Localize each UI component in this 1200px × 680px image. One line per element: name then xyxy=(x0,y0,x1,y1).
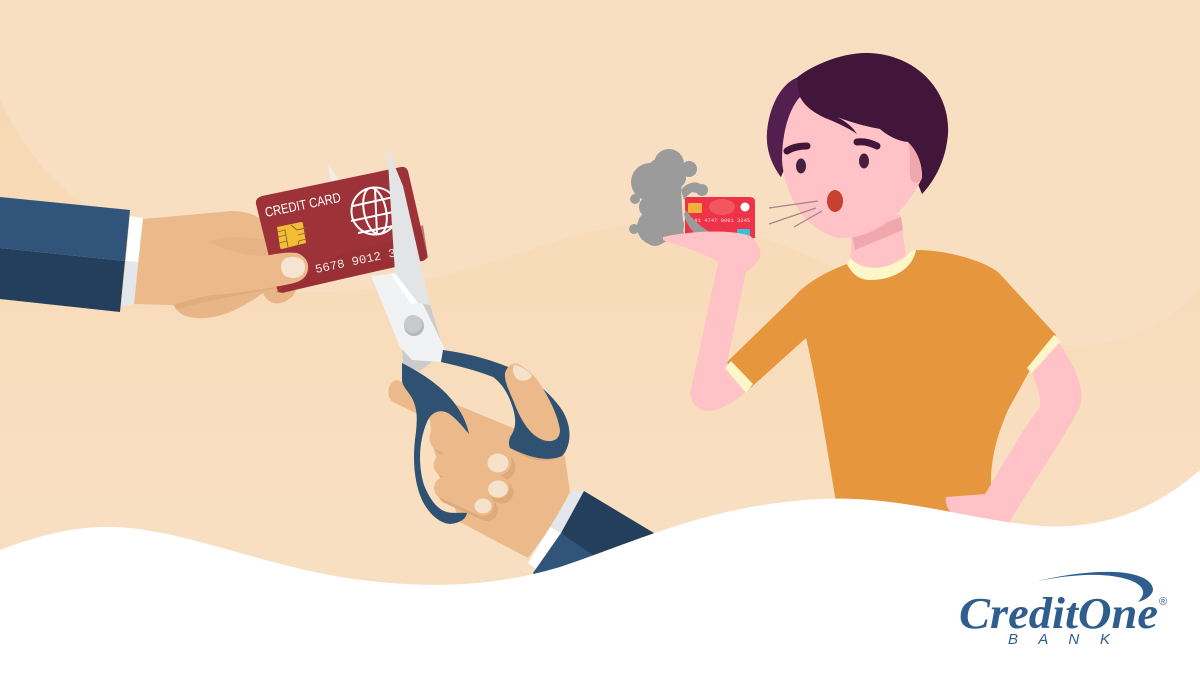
white lower blade xyxy=(371,273,445,362)
back arm xyxy=(946,343,1081,525)
shirt xyxy=(727,250,1056,515)
ear shadow xyxy=(908,143,922,183)
hand body and index finger xyxy=(388,380,570,558)
card number: 5678 9012 3 xyxy=(314,246,397,277)
globe icon xyxy=(351,186,398,236)
person xyxy=(629,53,1081,525)
logo bank text: B A N K xyxy=(1008,631,1111,648)
thumbnail xyxy=(281,257,305,278)
eyebrows xyxy=(787,142,877,151)
small card logo xyxy=(737,229,750,237)
mouth xyxy=(827,190,843,212)
collar xyxy=(847,250,916,280)
loop shadow xyxy=(512,438,566,461)
left handle loop xyxy=(402,363,469,524)
scissors handles xyxy=(402,350,570,524)
left hand palm xyxy=(134,211,300,305)
Credit One Bank logo xyxy=(959,572,1167,648)
hair back xyxy=(767,53,948,194)
front hair xyxy=(797,53,948,194)
eyes xyxy=(796,154,869,174)
blade highlight xyxy=(391,273,418,304)
finger shadows xyxy=(447,443,502,510)
credit card xyxy=(256,167,428,293)
raised arm xyxy=(663,230,760,411)
registered mark: ® xyxy=(1159,596,1167,608)
logo wordmark: CreditOne xyxy=(959,589,1158,638)
fingers xyxy=(443,438,498,505)
neck xyxy=(850,214,906,274)
small card chip xyxy=(688,203,702,213)
fingernails xyxy=(474,454,508,514)
right shirt cuff and sleeve xyxy=(528,491,654,585)
pivot screw xyxy=(404,315,424,336)
shirt cuff xyxy=(121,216,143,307)
small card number: 8101 4747 0001 3345 xyxy=(688,218,750,224)
scissor hand xyxy=(388,380,570,558)
small card badge xyxy=(740,202,750,212)
side hair xyxy=(767,78,810,177)
grey blade underside xyxy=(402,303,445,371)
top cutting blade xyxy=(387,147,430,305)
lower blade tip behind card xyxy=(328,163,338,190)
scissor thumb xyxy=(505,363,560,441)
under thumb shade xyxy=(173,283,285,309)
background hill wave xyxy=(0,100,1200,560)
left hand lower fingers xyxy=(170,270,296,318)
chip xyxy=(277,222,306,249)
small card xyxy=(685,197,755,238)
card shading xyxy=(276,225,428,293)
finger shadow xyxy=(209,237,270,256)
scissor thumbnail xyxy=(513,365,532,381)
card title: CREDIT CARD xyxy=(264,190,342,220)
scissors blades xyxy=(371,147,445,371)
smoke xyxy=(629,149,722,246)
left sleeve band xyxy=(725,361,753,393)
right sleeve band xyxy=(1027,335,1061,375)
left thumb xyxy=(160,253,308,296)
palm over card xyxy=(663,232,759,272)
sleeve xyxy=(0,197,130,312)
face xyxy=(782,97,922,238)
breath lines xyxy=(769,201,822,227)
logo swoosh xyxy=(1030,572,1153,602)
left arm holding card xyxy=(0,197,300,318)
white bottom wave xyxy=(0,470,1200,680)
right handle loop xyxy=(441,350,570,459)
